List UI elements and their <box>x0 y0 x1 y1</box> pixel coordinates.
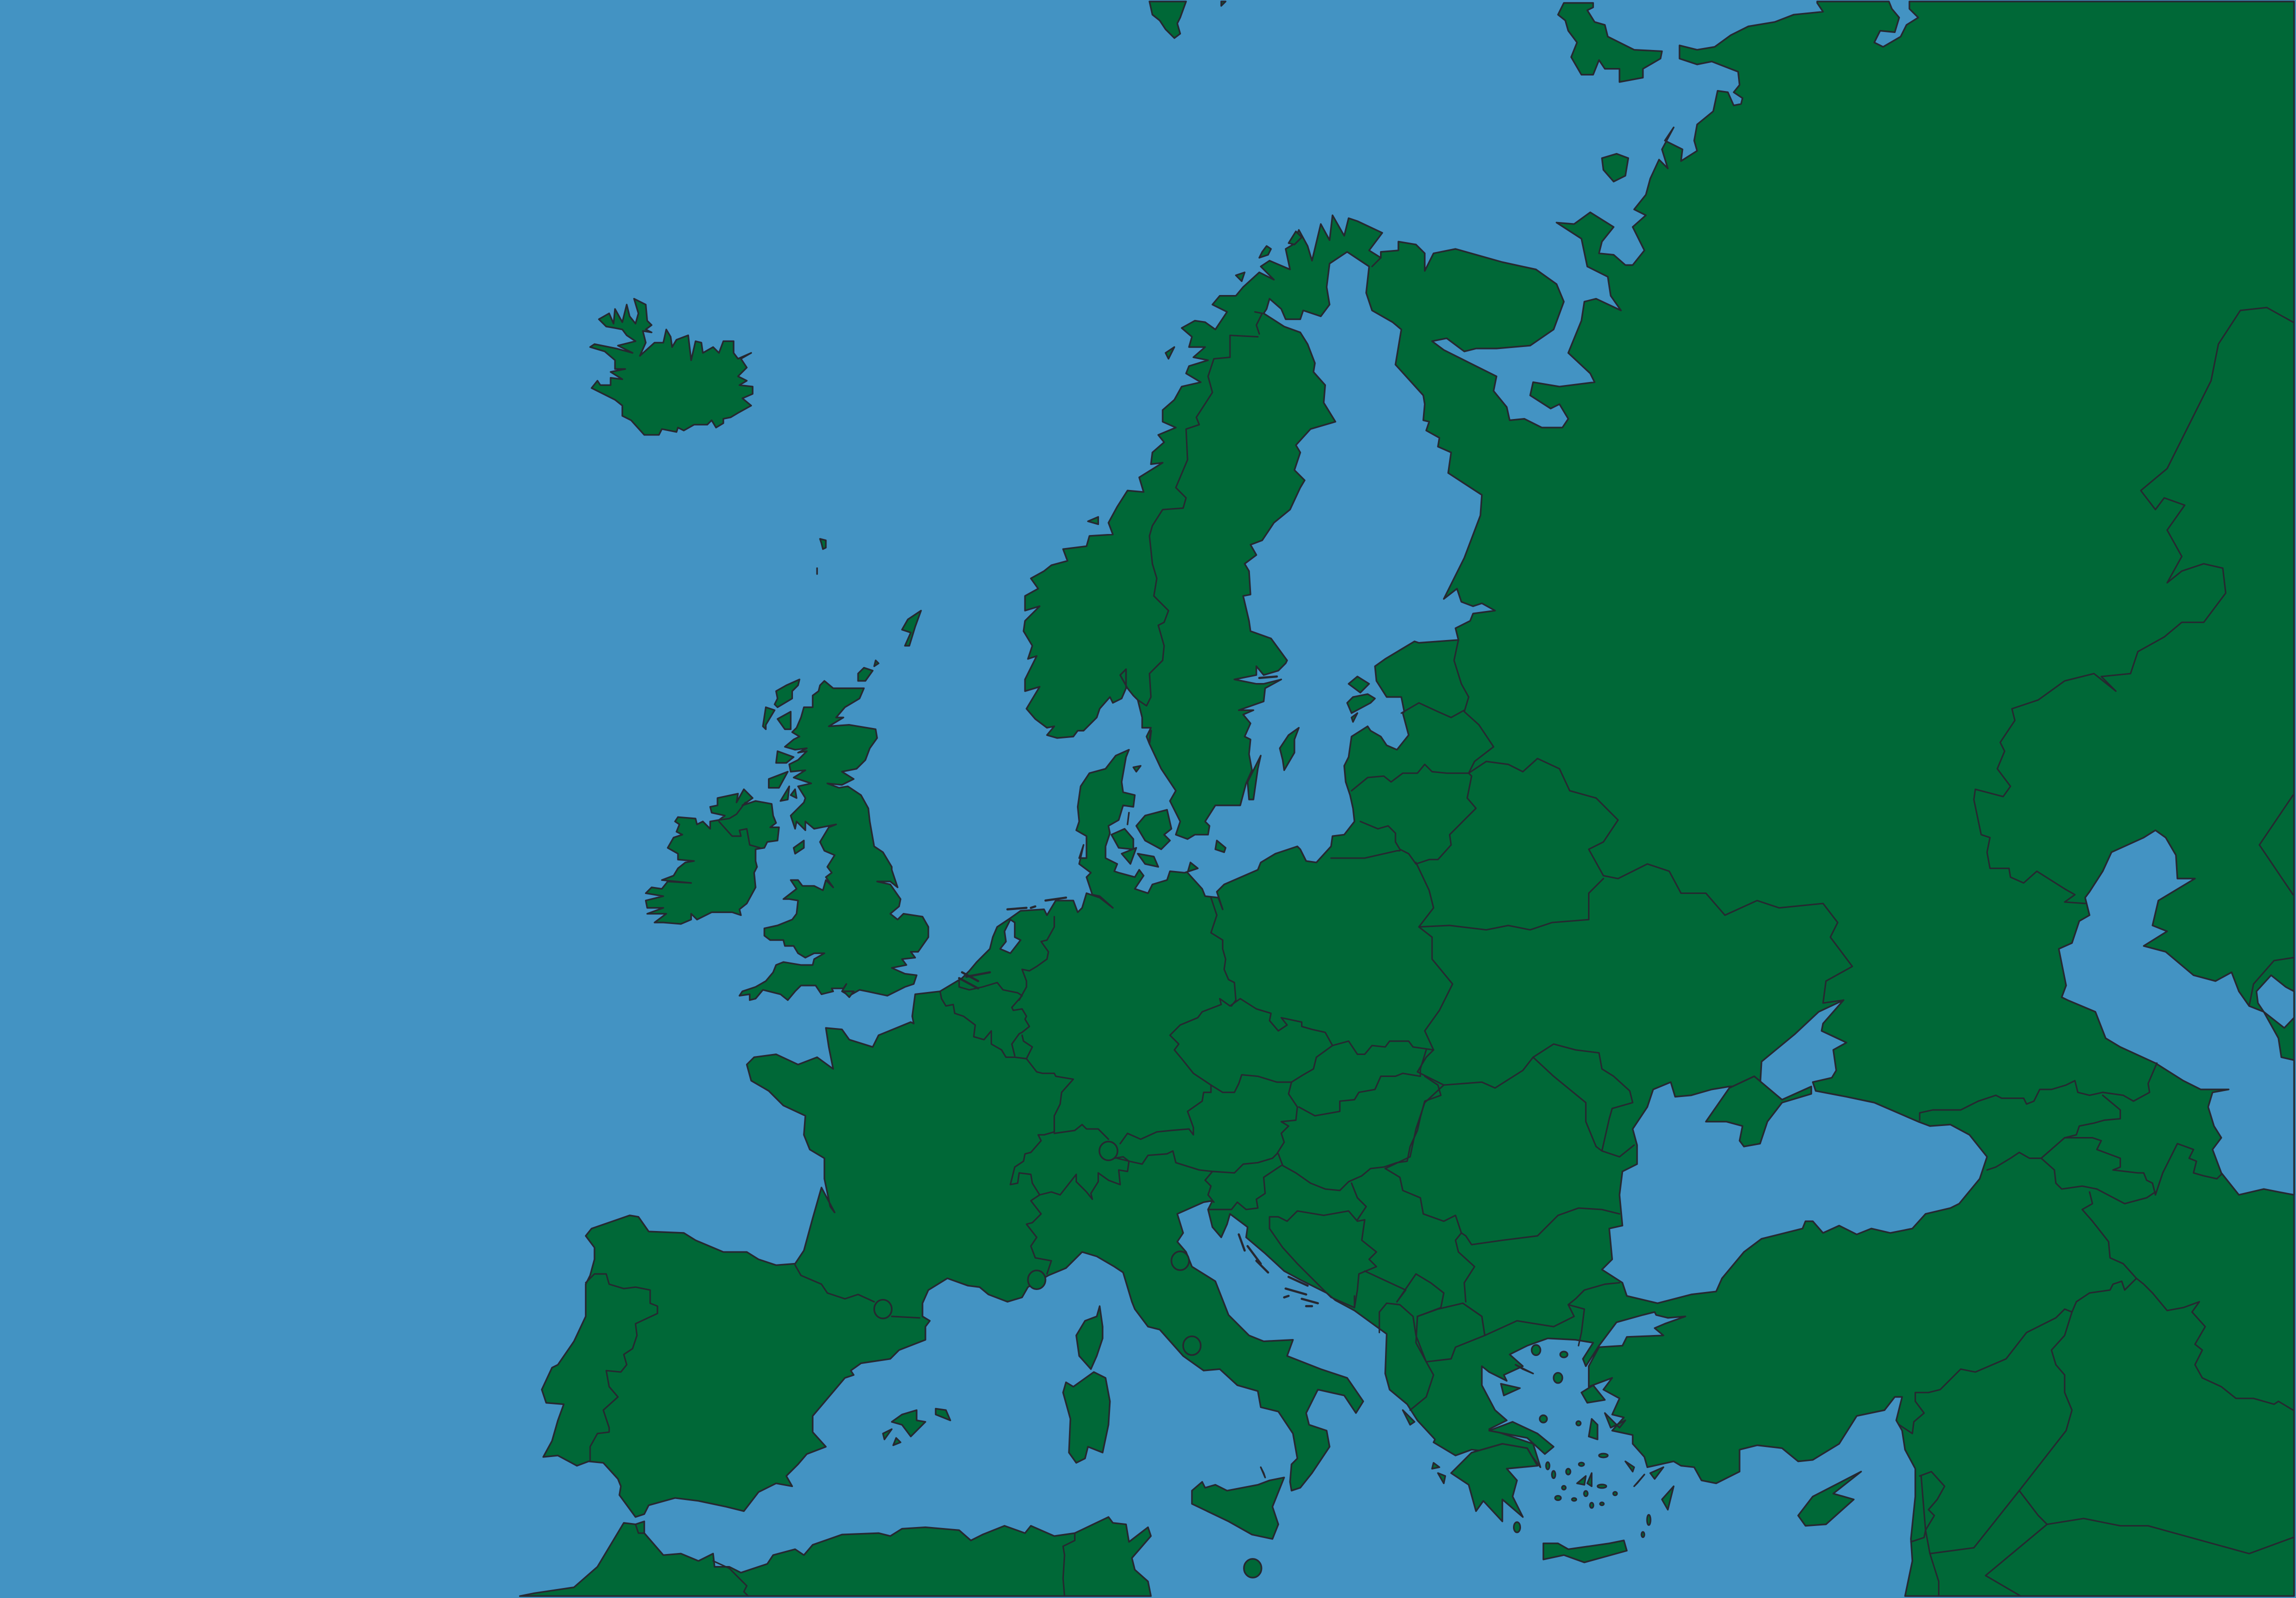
north Africa <box>520 1517 1151 1596</box>
Cyprus <box>1798 1472 1861 1526</box>
Northern Ireland border <box>719 802 760 848</box>
Kara-Bogaz bay <box>2256 975 2294 1028</box>
Ireland <box>646 790 779 924</box>
Baltic islands and Danish archipelago <box>1112 676 1375 867</box>
Black Sea and Sea of Azov <box>1602 1000 1987 1303</box>
microstate markers <box>874 1142 1262 1578</box>
Adriatic and Wadden Sea islets <box>959 676 1318 1306</box>
Great Britain <box>740 681 928 1000</box>
Peloponnese <box>1451 1444 1538 1522</box>
Crimea <box>1706 1076 1812 1146</box>
Aegean and Ionian islands <box>1403 1345 1674 1537</box>
Arctic and North Atlantic islands <box>763 2 1662 997</box>
country borders <box>586 258 2293 1596</box>
mainland Eurasia <box>542 2 2294 1596</box>
Crete <box>1544 1540 1627 1562</box>
Iceland <box>590 298 752 435</box>
IJsselmeer <box>1000 920 1020 954</box>
Caspian Sea <box>2059 830 2294 1195</box>
Mediterranean islands <box>883 1306 1284 1539</box>
